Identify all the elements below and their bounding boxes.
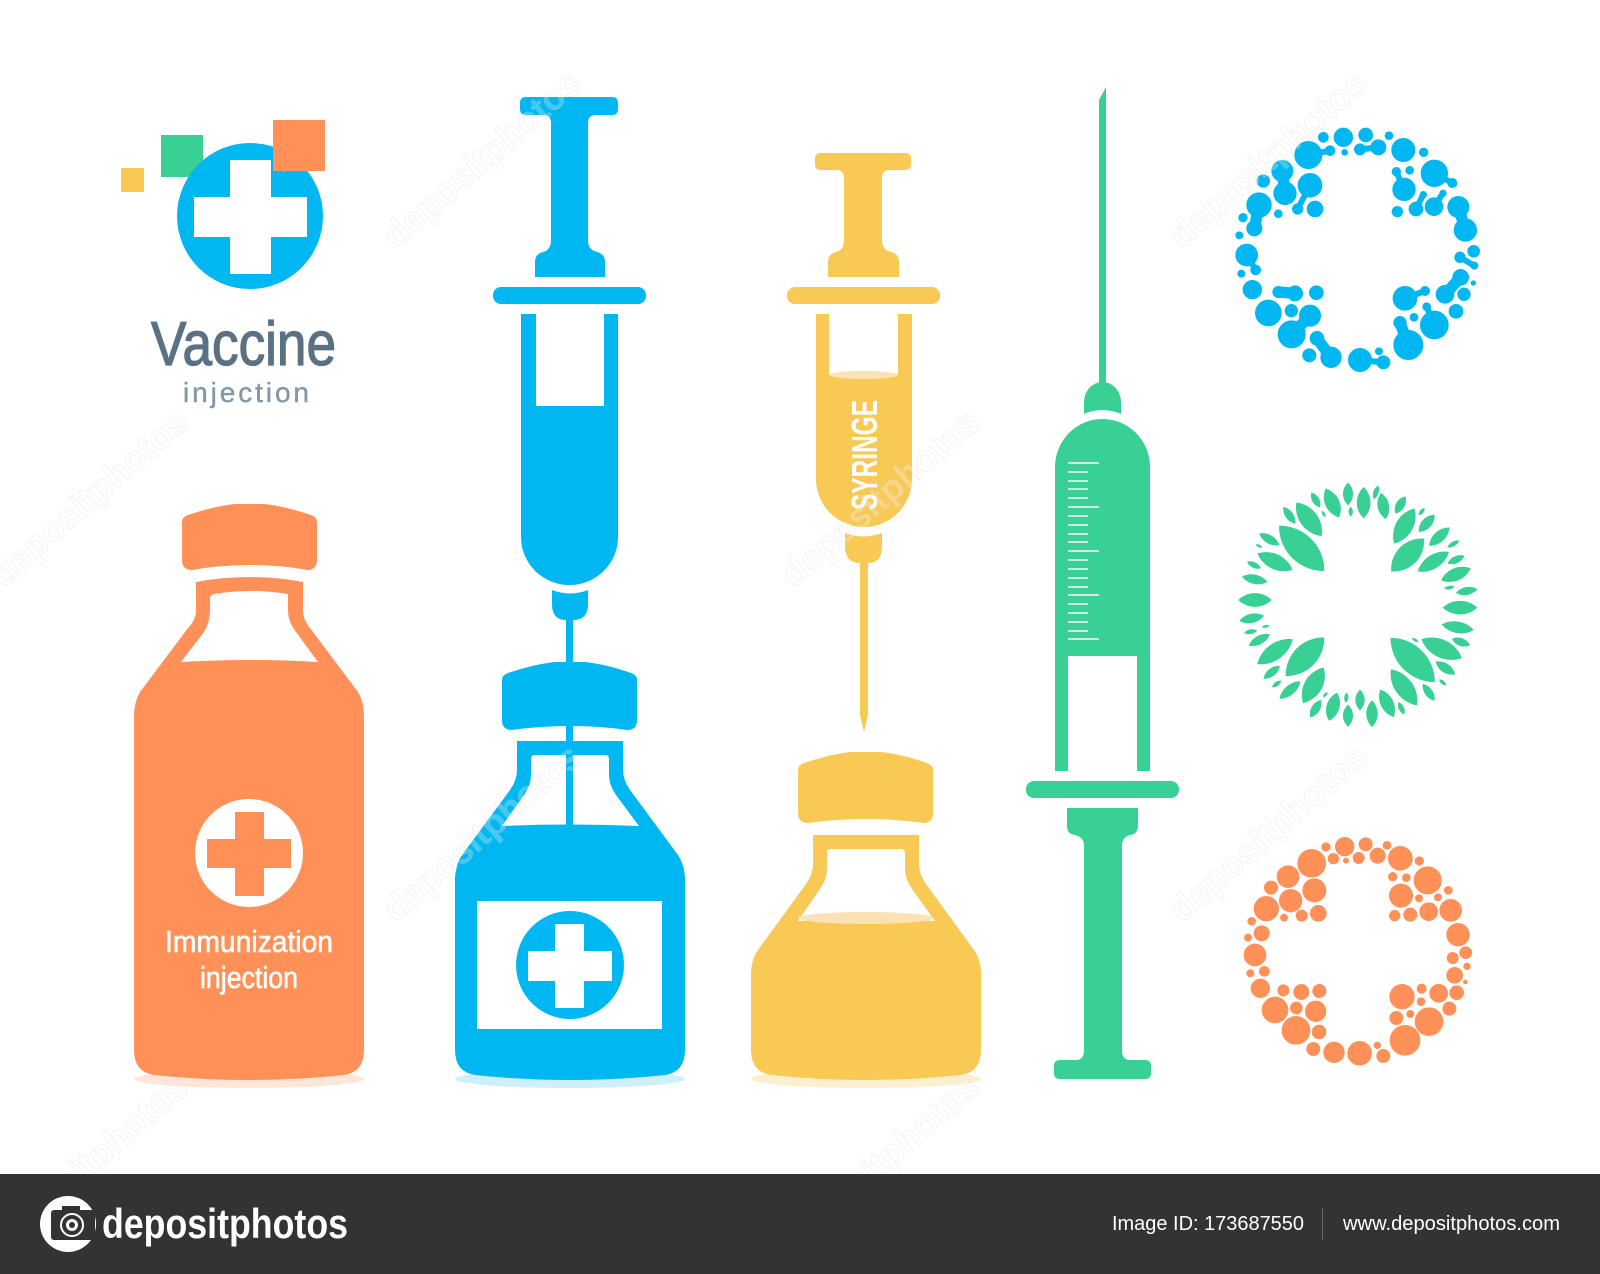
footer bar — [0, 1174, 1600, 1274]
website: www.depositphotos.com — [1342, 1213, 1560, 1235]
yellow bottle — [751, 752, 981, 1088]
watermark pattern: depositphotos — [1161, 62, 1375, 255]
watermark pattern: depositphotos — [1161, 736, 1375, 929]
logo: vaccine cross badge — [121, 120, 325, 289]
watermark pattern: depositphotos — [773, 1066, 987, 1259]
blue bottle — [455, 662, 685, 1088]
icon: green leaf cross — [1238, 483, 1478, 727]
title: Vaccine: Vaccine — [151, 310, 336, 379]
footer logo icon: camera — [40, 1196, 96, 1252]
yellow syringe — [787, 153, 940, 732]
icon: orange dots cross — [1244, 837, 1472, 1065]
blue syringe — [493, 97, 646, 826]
watermark pattern: depositphotos — [773, 401, 987, 594]
label: Immunization injection: Immunization — [165, 924, 333, 959]
watermark pattern: depositphotos — [375, 736, 589, 929]
scale ticks — [1068, 463, 1099, 639]
label: Immunization injection: injection — [200, 960, 298, 995]
label: Immunization injection — [165, 924, 333, 995]
footer logo wordmark: depositphotos — [102, 1200, 348, 1247]
label: SYRINGE: SYRINGE — [844, 400, 885, 510]
orange bottle — [134, 504, 364, 1088]
subtitle: injection: injection — [183, 377, 309, 408]
icon: blue bubble cross — [1236, 128, 1479, 371]
green syringe — [1026, 87, 1179, 1079]
watermark pattern: depositphotos — [375, 62, 589, 255]
image id: Image ID: 173687550 — [1112, 1213, 1304, 1235]
